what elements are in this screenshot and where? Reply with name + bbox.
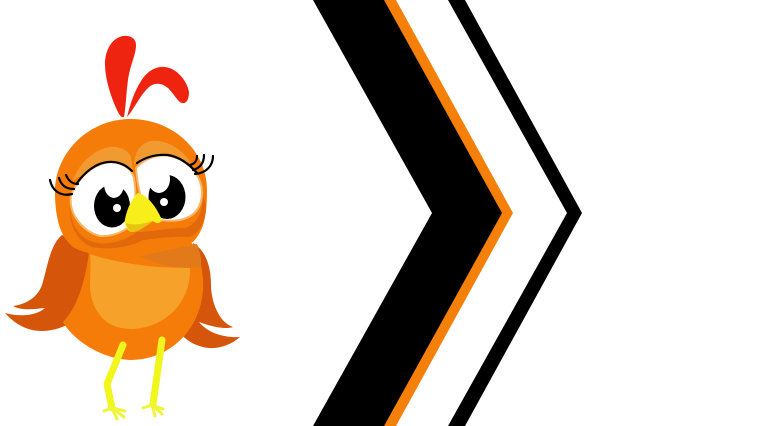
left leg	[107, 345, 123, 408]
left comb feather	[105, 36, 136, 117]
right leg	[153, 340, 162, 404]
left pupil	[94, 184, 130, 228]
left eyelashes	[50, 162, 132, 195]
orange chevron	[370, 0, 513, 426]
thin black chevron	[448, 0, 582, 426]
chick character	[5, 36, 240, 419]
right eye	[136, 155, 213, 221]
neck shadow	[140, 244, 201, 268]
right eyelashes	[137, 155, 213, 174]
right foot	[143, 405, 163, 416]
eyebrow patches	[73, 141, 191, 180]
body	[63, 240, 203, 360]
belly	[90, 254, 190, 329]
thick black chevron	[313, 0, 502, 426]
left eye	[50, 162, 136, 236]
left foot	[104, 408, 125, 419]
right wing	[182, 243, 240, 348]
left wing	[5, 235, 94, 331]
lower eye shadow	[70, 195, 206, 248]
beak	[125, 193, 162, 232]
right pupil	[148, 175, 186, 219]
right comb feather	[127, 67, 189, 117]
head	[55, 119, 207, 254]
